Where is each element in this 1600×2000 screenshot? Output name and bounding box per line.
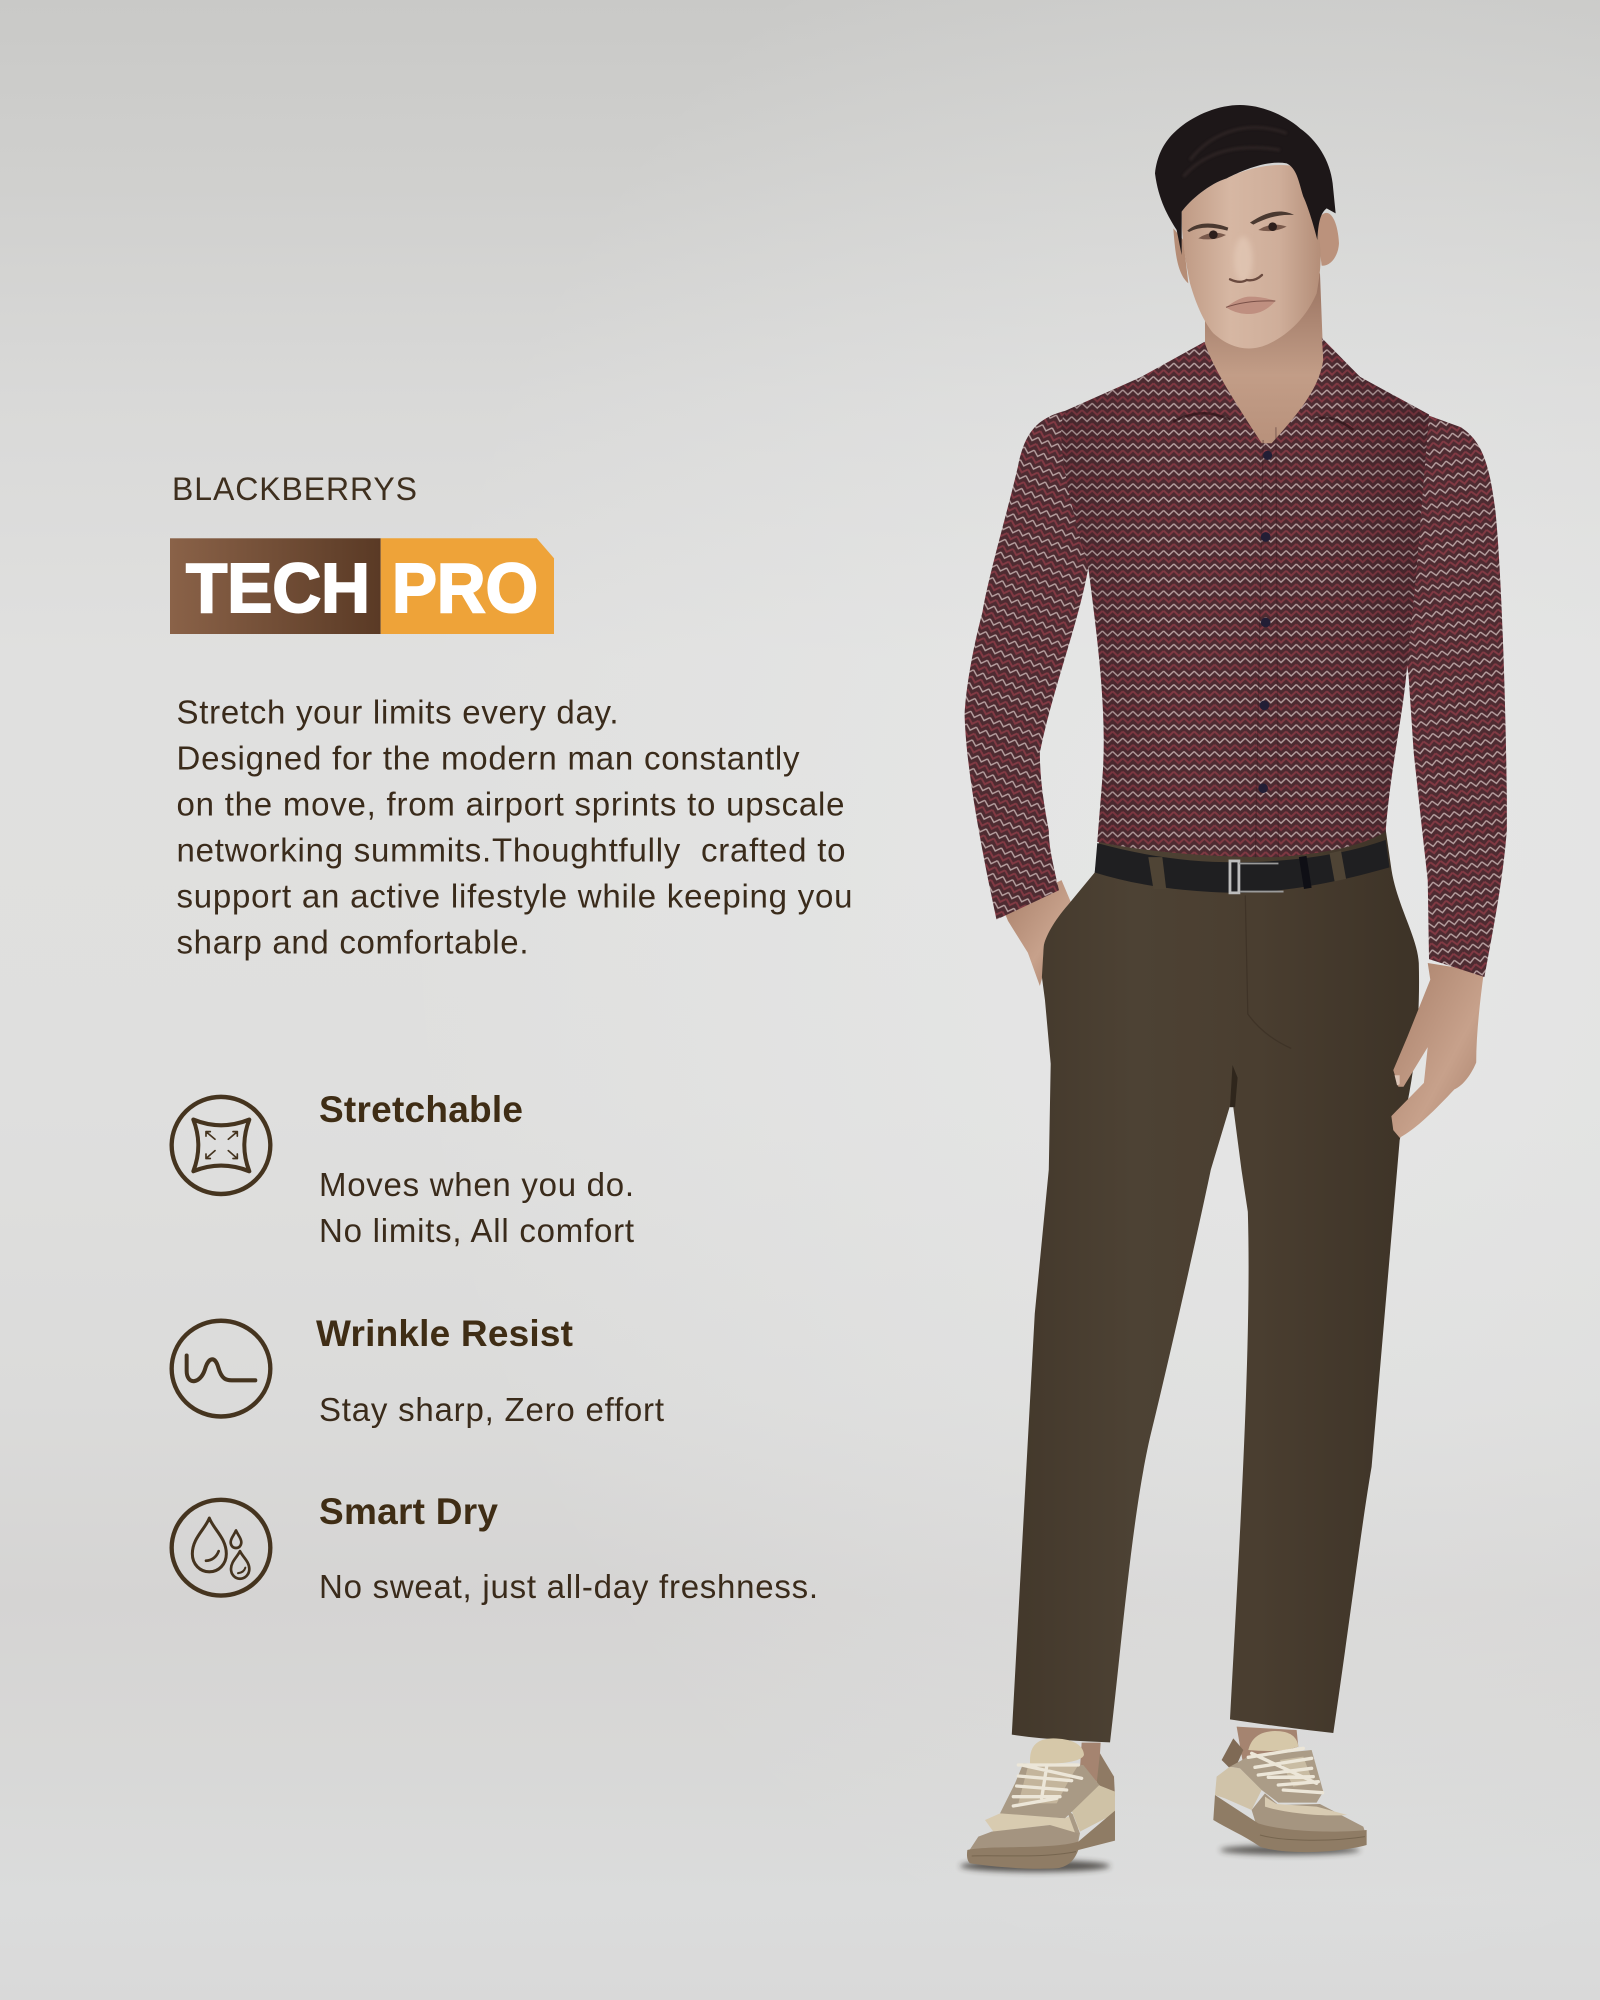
shirt left sleeve <box>965 411 1110 920</box>
model photo illustration <box>960 105 1507 1872</box>
intro paragraph: support an active lifestyle while keeping you <box>176 877 852 914</box>
collar <box>1173 337 1353 443</box>
text: wrinkle description: Stay sharp, Zero effort <box>319 1391 664 1428</box>
left sneaker <box>967 1738 1115 1869</box>
belt <box>1095 840 1389 893</box>
text: stretchable description <box>319 1166 634 1249</box>
intro paragraph: Stretch your limits every day. <box>176 693 618 730</box>
icon: stretch fabric <box>172 1097 270 1194</box>
shirt body <box>1061 338 1429 857</box>
feature: wrinkle resist <box>172 1313 664 1428</box>
heading: stretchable: Stretchable <box>319 1089 523 1130</box>
brand name: BLACKBERRYS <box>172 471 417 507</box>
shirt right sleeve <box>1384 402 1507 977</box>
neck <box>1205 273 1323 443</box>
heading: smart dry: Smart Dry <box>319 1491 498 1532</box>
feature: smart dry <box>172 1491 818 1605</box>
left hand in pocket <box>1003 880 1072 986</box>
intro paragraph: networking summits.Thoughtfully crafted to <box>176 831 846 868</box>
intro paragraph: sharp and comfortable. <box>176 923 528 960</box>
intro paragraph: on the move, from airport sprints to upscale <box>176 785 844 822</box>
text: stretchable description: No limits, All comfort <box>319 1212 634 1249</box>
logo: Tech Pro: TECH <box>186 549 370 627</box>
icon: wrinkle curve <box>172 1321 270 1416</box>
ears <box>1173 213 1339 283</box>
hair <box>1155 105 1336 255</box>
feature: stretchable <box>172 1089 634 1249</box>
floor shadow <box>960 1845 1360 1872</box>
trousers <box>1012 829 1419 1742</box>
intro paragraph <box>176 693 852 960</box>
logo: Tech Pro: PRO <box>392 549 538 627</box>
heading: wrinkle resist: Wrinkle Resist <box>316 1313 573 1354</box>
placket and buttons <box>1255 427 1278 857</box>
icon: water drops <box>172 1500 270 1596</box>
text: smart dry description: No sweat, just all-day freshness. <box>319 1568 818 1605</box>
logo: Tech Pro <box>170 538 554 634</box>
right sneaker <box>1213 1727 1367 1852</box>
face <box>1182 165 1321 349</box>
right hand <box>1391 963 1484 1138</box>
text: stretchable description: Moves when you do. <box>319 1166 634 1203</box>
intro paragraph: Designed for the modern man constantly <box>176 739 800 776</box>
